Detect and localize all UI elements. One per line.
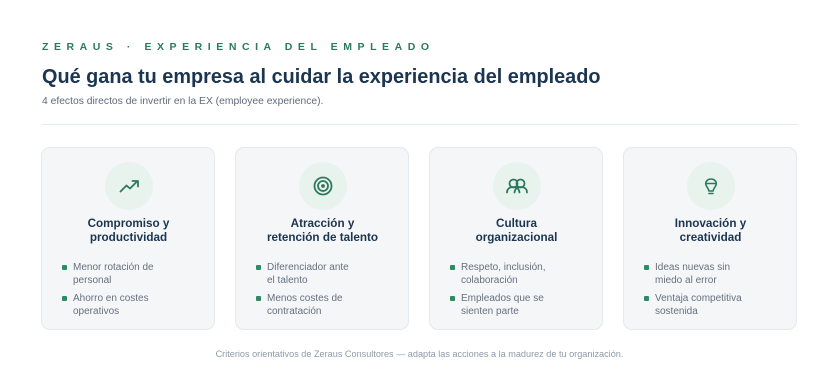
bullet: ventaja: sostenida xyxy=(655,306,698,316)
footer note: Criterios orientativos de Zeraus Consultores — adapta las acciones a la madurez de tu organización. xyxy=(216,348,623,358)
bullet: ahorro: operativos xyxy=(73,306,119,316)
heading: cultura: organizacional xyxy=(476,231,557,244)
eyebrow: ZERAUS · EXPERIENCIA DEL EMPLEADO xyxy=(42,41,435,53)
icon: trending up xyxy=(104,162,152,210)
bullet: diferenciador: Diferenciador ante xyxy=(267,262,349,273)
bullet: menor rotación xyxy=(62,262,154,286)
bullet: ideas: miedo al error xyxy=(655,274,717,286)
panel: atracción y retención xyxy=(235,146,409,330)
bullet: empleados: Empleados que se xyxy=(461,293,544,304)
bullet: ventaja: Ventaja competitiva xyxy=(655,293,742,304)
bullet: diferenciador xyxy=(256,262,349,286)
icon: target xyxy=(298,162,346,210)
bullet: menos costes xyxy=(256,293,343,316)
bullet: ideas: Ideas nuevas sin xyxy=(655,262,730,273)
heading: atracción xyxy=(267,217,378,244)
bullet: diferenciador: el talento xyxy=(267,274,308,286)
title: Qué gana tu empresa al cuidar la experiencia del empleado xyxy=(42,66,600,88)
heading: compromiso: productividad xyxy=(90,231,167,244)
bullet: menor rotación: personal xyxy=(73,274,111,286)
bullet: menos costes: contratación xyxy=(267,306,321,316)
panel: innovación y creatividad xyxy=(623,146,797,330)
bullet: respeto xyxy=(450,262,546,286)
heading: cultura xyxy=(476,217,557,244)
heading: atracción: Atracción y xyxy=(291,217,354,230)
bullet: ventaja xyxy=(644,293,742,316)
heading: cultura: Cultura xyxy=(496,217,537,230)
bullet: empleados xyxy=(450,293,544,316)
heading: innovación: creatividad xyxy=(680,231,741,244)
icon: people xyxy=(492,162,540,210)
heading: innovación: Innovación y xyxy=(675,217,746,230)
heading: compromiso xyxy=(88,217,170,244)
bullet: ahorro: Ahorro en costes xyxy=(73,293,149,304)
bullet: empleados: sienten parte xyxy=(461,306,519,316)
heading: compromiso: Compromiso y xyxy=(88,217,169,230)
panel: cultura organizacional xyxy=(429,146,603,330)
heading: innovación xyxy=(675,217,746,244)
bullet: menos costes: Menos costes de xyxy=(267,293,343,304)
bullet: respeto: colaboración xyxy=(461,274,518,286)
panel: compromiso y productividad xyxy=(41,146,215,330)
subtitle: 4 efectos directos de invertir en la EX (employee experience). xyxy=(42,96,323,107)
bullet: ideas xyxy=(644,262,730,286)
icon: light bulb xyxy=(686,162,734,210)
bullet: respeto: Respeto, inclusión, xyxy=(461,262,546,273)
heading: atracción: retención de talento xyxy=(267,231,378,244)
bullet: menor rotación: Menor rotación de xyxy=(73,262,154,273)
bullet: ahorro xyxy=(62,293,149,316)
